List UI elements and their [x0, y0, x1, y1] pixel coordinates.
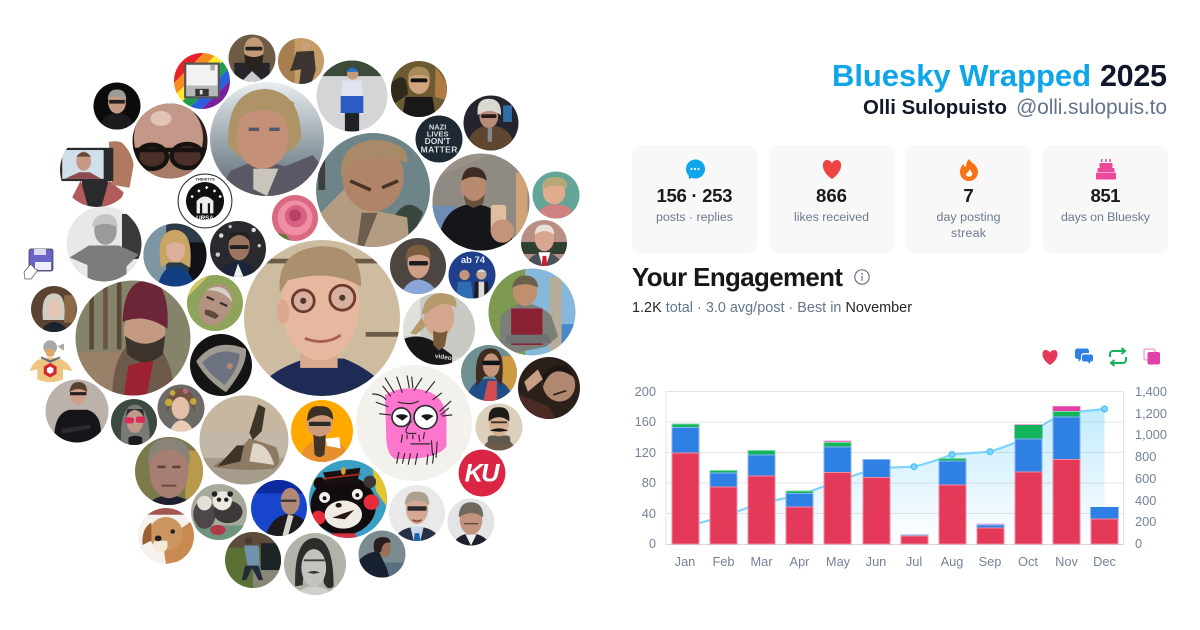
- icon: flame: [960, 159, 978, 181]
- month labels: Feb: [712, 554, 735, 569]
- month labels: [675, 554, 1116, 569]
- left axis labels: 200: [635, 384, 656, 399]
- avatar: black and white moustached man: [284, 533, 346, 595]
- left axis labels: 160: [635, 414, 656, 429]
- bar: Apr: [786, 491, 813, 544]
- bar: Aug: [939, 458, 966, 544]
- avatar: person with red glasses: [111, 399, 157, 445]
- month labels: Oct: [1018, 554, 1038, 569]
- avatar: slogan t-shirt: MATTER: [421, 145, 457, 155]
- avatar: slogan t-shirt: NAZI: [429, 123, 446, 132]
- avatar: long-haired man with grey jacket: [210, 82, 324, 196]
- month labels: Jul: [906, 554, 922, 569]
- bar: Oct: [1015, 424, 1042, 544]
- avatar: man holding a phone: [60, 141, 134, 207]
- avatar: panda painting: [191, 484, 247, 540]
- avatar: reclining man in dark: [518, 357, 580, 419]
- bar: Jun: [863, 460, 890, 544]
- right axis labels: 400: [1135, 493, 1156, 508]
- month labels: Apr: [790, 554, 810, 569]
- avatar: floppy disk with hand: [24, 249, 53, 279]
- avatar: bald man with red tie: [521, 220, 567, 266]
- stacked bars: [672, 406, 1118, 544]
- title: Bluesky Wrapped: [832, 58, 1091, 93]
- avatar: bearded man with glasses: [228, 34, 276, 82]
- user name and handle: @olli.sulopuis.to: [1016, 96, 1167, 119]
- icon: chat bubble: [686, 159, 705, 179]
- avatar: person in dark hood in profile: [358, 530, 406, 578]
- right axis labels: 1,400: [1135, 384, 1167, 399]
- avatar: man with red vest outdoors: [488, 268, 576, 356]
- month labels: Jan: [675, 554, 695, 569]
- bar: Dec: [1091, 508, 1118, 544]
- avatar: main profile man with round glasses: [244, 240, 400, 396]
- right axis labels: 200: [1135, 514, 1156, 529]
- avatar: blonde woman in blue: [144, 224, 206, 286]
- avatar: skier in blue suit: [316, 60, 388, 133]
- avatar: seated man: [278, 38, 324, 84]
- stat card: day posting streak: [906, 145, 1031, 253]
- left axis labels: 40: [642, 506, 656, 521]
- stat card: likes received: 866: [816, 185, 847, 206]
- avatar: man in suit on blue TV backdrop: [251, 480, 307, 536]
- month labels: Sep: [979, 554, 1001, 569]
- avatar cluster: [24, 33, 580, 595]
- bar: Mar: [748, 450, 775, 544]
- avatar: KU logo: KU: [465, 459, 500, 487]
- avatar: two men on blue backdrop: [448, 252, 496, 298]
- avatar: golden retriever: [138, 508, 194, 564]
- avatar: woman with hair curlers: [158, 384, 204, 432]
- user name and handle: [863, 96, 1167, 119]
- heading: your engagement: Your Engagement: [632, 264, 843, 292]
- avatar: man with sunglasses and long hair: [461, 345, 517, 401]
- left axis labels: 0: [649, 536, 656, 551]
- avatar: rainbow floppy disk: [174, 53, 230, 109]
- chart legend: [1042, 348, 1160, 366]
- icon: legend quotes: [1144, 349, 1160, 364]
- bar: Sep: [977, 524, 1004, 544]
- stat card: posts and replies: posts · replies: [656, 210, 733, 224]
- stat card: days on Bluesky: days on Bluesky: [1061, 210, 1151, 224]
- month labels: Nov: [1055, 554, 1078, 569]
- left axis labels: 80: [642, 475, 656, 490]
- right axis labels: 600: [1135, 471, 1156, 486]
- stat card: day posting streak: 7: [963, 185, 974, 206]
- bar: Jul: [901, 534, 928, 544]
- avatar: man on orange background: [291, 400, 353, 462]
- stat card: likes received: [769, 145, 894, 253]
- icon: birthday cake: [1096, 159, 1116, 180]
- avatar: person on lawn: [225, 532, 281, 588]
- avatar: bird in flight: [200, 396, 288, 484]
- month labels: Jun: [866, 554, 886, 569]
- month labels: Dec: [1093, 554, 1116, 569]
- right axis labels: 1,200: [1135, 406, 1167, 421]
- avatar: mirror selfie in black sweater: [432, 154, 530, 250]
- avatar: man with moustache: [476, 404, 522, 450]
- avatar: URSA seal: YHDISTYS: [195, 176, 215, 181]
- avatar: slogan t-shirt: DON'T: [425, 136, 451, 146]
- engagement summary: 1.2K total · 3.0 avg/post · Best in November: [632, 300, 912, 316]
- icon: legend reposts: [1110, 348, 1126, 366]
- avatar: URSA seal: [177, 173, 233, 229]
- left axis labels: 120: [635, 445, 656, 460]
- icon: legend heart: [1042, 350, 1058, 365]
- bar: Nov: [1053, 406, 1080, 544]
- avatar: URSA seal: URSA: [196, 215, 214, 222]
- avatar: two men on blue backdrop: ab 74: [461, 254, 486, 265]
- right axis labels: [1135, 384, 1167, 551]
- icon: legend replies: [1075, 348, 1093, 364]
- left axis labels: [635, 384, 656, 551]
- avatar: man on black background: [94, 82, 140, 130]
- month labels: Aug: [941, 554, 963, 569]
- stat card: posts and replies: 156 · 253: [656, 185, 732, 206]
- avatar: older man in suit with blue tie: [389, 485, 445, 541]
- chart gridlines: [666, 391, 1124, 544]
- avatar: bald man with green background: [187, 275, 243, 331]
- avatar: kid with sunglasses: [391, 61, 447, 117]
- avatar: man with glasses and blue shirt: [390, 238, 446, 294]
- bar: Jan: [672, 424, 699, 544]
- avatar: pink rose: [272, 195, 318, 241]
- avatar: man in beige shirt, stormy sky: [316, 133, 430, 247]
- month labels: May: [826, 554, 851, 569]
- avatar: Kumamon bear: [309, 460, 387, 538]
- avatar: pixel grandmother character: [30, 340, 72, 382]
- stat card: posts and replies: [632, 145, 757, 253]
- stat card: day posting streak: streak: [951, 226, 987, 240]
- avatar: smiling child: [532, 172, 580, 218]
- avatar: grey-haired woman: [31, 286, 77, 332]
- avatar: KU logo: [458, 450, 506, 496]
- avatar: bearded man in maroon beanie: [76, 280, 190, 396]
- avatar: car mirror reflection: [190, 334, 252, 396]
- avatar: pink cartoon face: [356, 365, 472, 481]
- right axis labels: 0: [1135, 536, 1142, 551]
- avatar: man with ponytail and goatee: [403, 293, 475, 365]
- avatar: man in dark suit: [448, 498, 494, 546]
- bar: Feb: [710, 470, 737, 544]
- avatar: black and white portrait: [66, 206, 142, 282]
- engagement chart: [635, 384, 1167, 569]
- avatar: man close-up in forest: [135, 437, 203, 505]
- icon: heart: [823, 160, 841, 179]
- right axis labels: 800: [1135, 449, 1156, 464]
- avatar: slogan t-shirt: [416, 116, 462, 162]
- right axis labels: 1,000: [1135, 427, 1167, 442]
- avatar: slogan t-shirt: LIVES: [427, 130, 448, 139]
- bar: May: [824, 441, 851, 544]
- icon: info: [855, 270, 869, 284]
- avatar: bald man close-up with glasses: [132, 100, 208, 178]
- user name and handle: Olli Sulopuisto: [863, 97, 1007, 119]
- avatar: white-haired woman with microphone: [464, 96, 518, 150]
- avatar: man with stars backdrop: [210, 221, 266, 277]
- avatar: man with ponytail and goatee: video game: [434, 353, 471, 365]
- stat card: day posting streak: day posting: [936, 210, 1001, 224]
- cumulative area and line: [685, 406, 1108, 544]
- stat card: days on Bluesky: [1043, 145, 1168, 253]
- month labels: Mar: [750, 554, 773, 569]
- title: 2025: [1100, 59, 1167, 93]
- stat card: days on Bluesky: 851: [1090, 185, 1120, 206]
- avatar: man in black sweater with arms crossed: [46, 380, 108, 442]
- stat card: likes received: likes received: [794, 210, 869, 224]
